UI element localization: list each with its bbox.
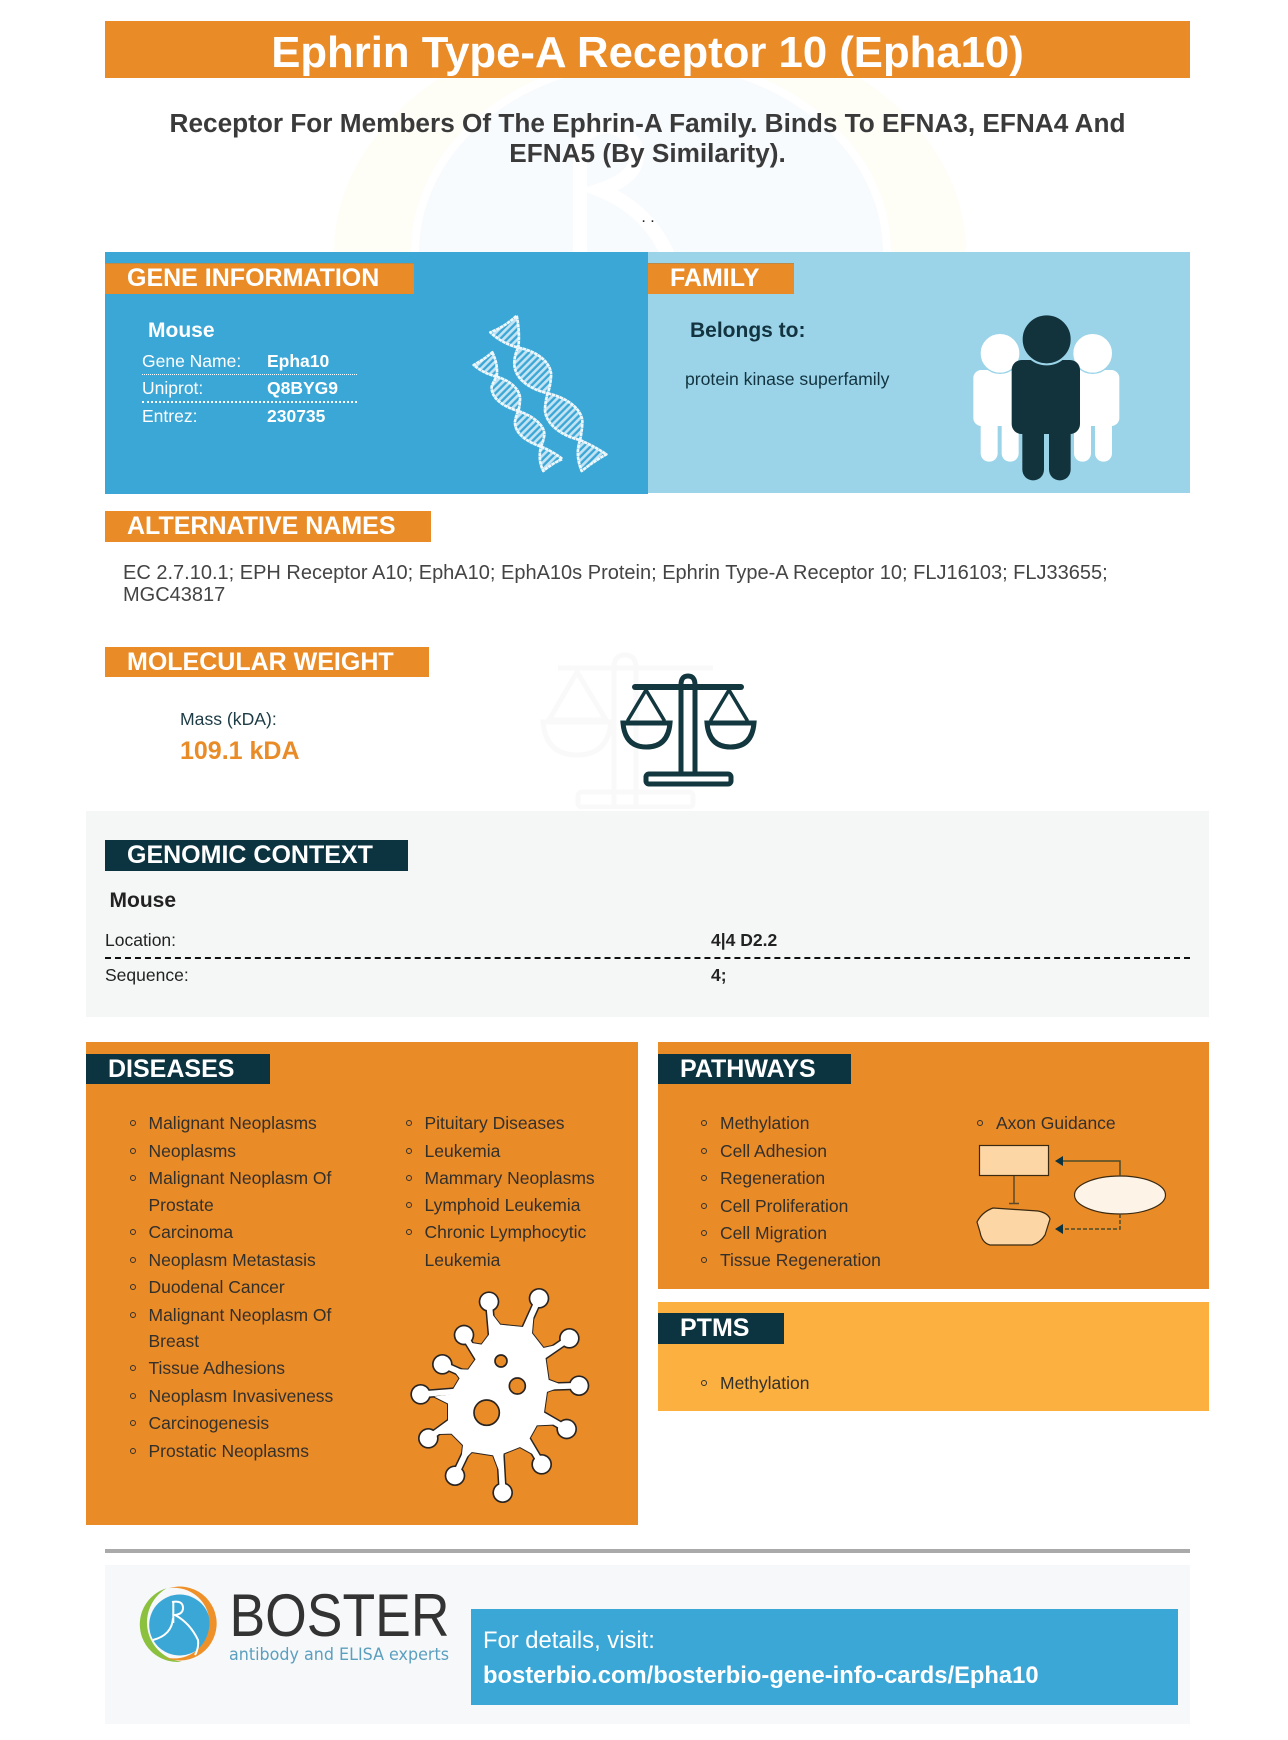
diseases list column 1: Breast: [148, 1331, 199, 1351]
icon: balance scale: [620, 674, 757, 786]
gene detail table: Entrez:: [142, 406, 197, 426]
diseases list column 2: Lymphoid Leukemia: [424, 1195, 580, 1215]
gene detail table: Uniprot:: [142, 378, 203, 398]
panel: gene information: [105, 252, 648, 494]
heading: diseases: DISEASES: [108, 1055, 234, 1083]
diseases list column 2: Leukemia: [424, 1141, 500, 1161]
heading: gene information: GENE INFORMATION: [127, 264, 379, 292]
subtitle: Receptor For Members Of The Ephrin-A Family. Binds To EFNA3, EFNA4 And: [170, 108, 1125, 138]
pathways list column 1: Methylation: [720, 1113, 810, 1133]
family name: protein kinase superfamily: [685, 369, 889, 389]
genomic table: 4;: [711, 965, 727, 985]
genomic table: Sequence:: [105, 965, 189, 985]
genomic table: 4|4 D2.2: [711, 930, 777, 950]
pathways list column 1: [701, 1113, 881, 1270]
heading: pathways: PATHWAYS: [680, 1055, 816, 1083]
alternative names text: EC 2.7.10.1; EPH Receptor A10; EphA10; EphA10s Protein; Ephrin Type-A Receptor 10; FLJ16103; FLJ33655;: [123, 562, 1108, 584]
section: molecular weight: [105, 647, 757, 786]
icon: dna: [472, 315, 608, 472]
diseases list column 1: Duodenal Cancer: [148, 1277, 285, 1297]
diseases list column 1: [130, 1113, 333, 1461]
diseases list column 1: Neoplasm Metastasis: [148, 1250, 316, 1270]
diseases list column 2: Mammary Neoplasms: [424, 1168, 595, 1188]
details label: For details, visit:: [483, 1627, 655, 1654]
pathways list column 1: Tissue Regeneration: [720, 1250, 881, 1270]
icon: people: [973, 315, 1120, 480]
genomic table: [105, 930, 1190, 985]
icon: pathway diagram: [976, 1144, 1166, 1246]
boster logo: antibody and ELISA experts: [229, 1645, 449, 1665]
diseases list column 2: Leukemia: [424, 1250, 500, 1270]
boster logo: [140, 1582, 450, 1665]
heading: pathways: [658, 1054, 851, 1084]
heading: diseases: [86, 1054, 270, 1084]
footer: [105, 1565, 1190, 1724]
pathways list column 1: Cell Adhesion: [720, 1141, 827, 1161]
diseases list column 2: Pituitary Diseases: [424, 1113, 565, 1133]
diseases list column 1: Prostatic Neoplasms: [148, 1441, 309, 1461]
pathways list column 2: Axon Guidance: [996, 1113, 1116, 1133]
diseases list column 2: Chronic Lymphocytic: [424, 1222, 586, 1242]
icon: virus: [410, 1288, 590, 1503]
small dots text: . .: [641, 209, 655, 226]
genomic table: Location:: [105, 930, 176, 950]
heading: family: [648, 263, 794, 294]
title banner: [105, 21, 1190, 78]
mass value: 109.1 kDA: [180, 737, 300, 765]
alternative names text: MGC43817: [123, 584, 225, 606]
pathways list column 1: Regeneration: [720, 1168, 825, 1188]
subtitle: EFNA5 (By Similarity).: [509, 138, 786, 168]
diseases list column 1: Carcinogenesis: [148, 1413, 269, 1433]
heading: molecular weight: MOLECULAR WEIGHT: [127, 648, 394, 676]
mass label: Mass (kDA):: [180, 709, 277, 729]
species label: Mouse: [148, 319, 215, 342]
diseases list column 1: Malignant Neoplasms: [148, 1113, 317, 1133]
panel: genomic context: [86, 811, 1209, 1017]
gene detail table: [142, 351, 357, 426]
call to action: [471, 1609, 1178, 1705]
diseases list column 1: Neoplasm Invasiveness: [148, 1386, 333, 1406]
subtitle: [170, 108, 1125, 168]
details url: bosterbio.com/bosterbio-gene-info-cards/Epha10: [483, 1662, 1039, 1689]
diseases list column 1: Neoplasms: [148, 1141, 236, 1161]
pathways list column 1: Cell Migration: [720, 1223, 827, 1243]
heading: ptms: [658, 1313, 784, 1344]
diseases list column 1: Tissue Adhesions: [148, 1358, 285, 1378]
panel: family: [648, 252, 1190, 493]
diseases list column 1: Carcinoma: [148, 1222, 233, 1242]
pathways list column 1: Cell Proliferation: [720, 1196, 848, 1216]
panel: pathways: [658, 1042, 1209, 1289]
gene detail table: Epha10: [267, 351, 329, 371]
heading: ptms: PTMS: [680, 1314, 749, 1342]
panel: diseases: [86, 1042, 638, 1525]
gene detail table: Q8BYG9: [267, 378, 338, 398]
icon: faint scale watermark: [536, 647, 766, 809]
alternative names text: [123, 562, 1108, 606]
heading: family: FAMILY: [670, 264, 759, 292]
title banner: Ephrin Type-A Receptor 10 (Epha10): [271, 28, 1024, 77]
ptms list: Methylation: [720, 1373, 810, 1393]
background watermark logo: [334, 78, 966, 252]
species label: Mouse: [110, 889, 176, 912]
diseases list column 1: Prostate: [148, 1195, 214, 1215]
panel: ptms: [658, 1302, 1209, 1411]
diseases list column 1: Malignant Neoplasm Of: [148, 1305, 331, 1325]
heading: genomic context: GENOMIC CONTEXT: [127, 841, 373, 869]
diseases list column 1: Malignant Neoplasm Of: [148, 1168, 331, 1188]
gene detail table: 230735: [267, 406, 325, 426]
heading: alternative names: ALTERNATIVE NAMES: [127, 512, 396, 540]
section: alternative names: [105, 511, 1108, 606]
diseases list column 2: [406, 1113, 595, 1270]
belongs to label: Belongs to:: [690, 319, 806, 342]
gene detail table: Gene Name:: [142, 351, 241, 371]
